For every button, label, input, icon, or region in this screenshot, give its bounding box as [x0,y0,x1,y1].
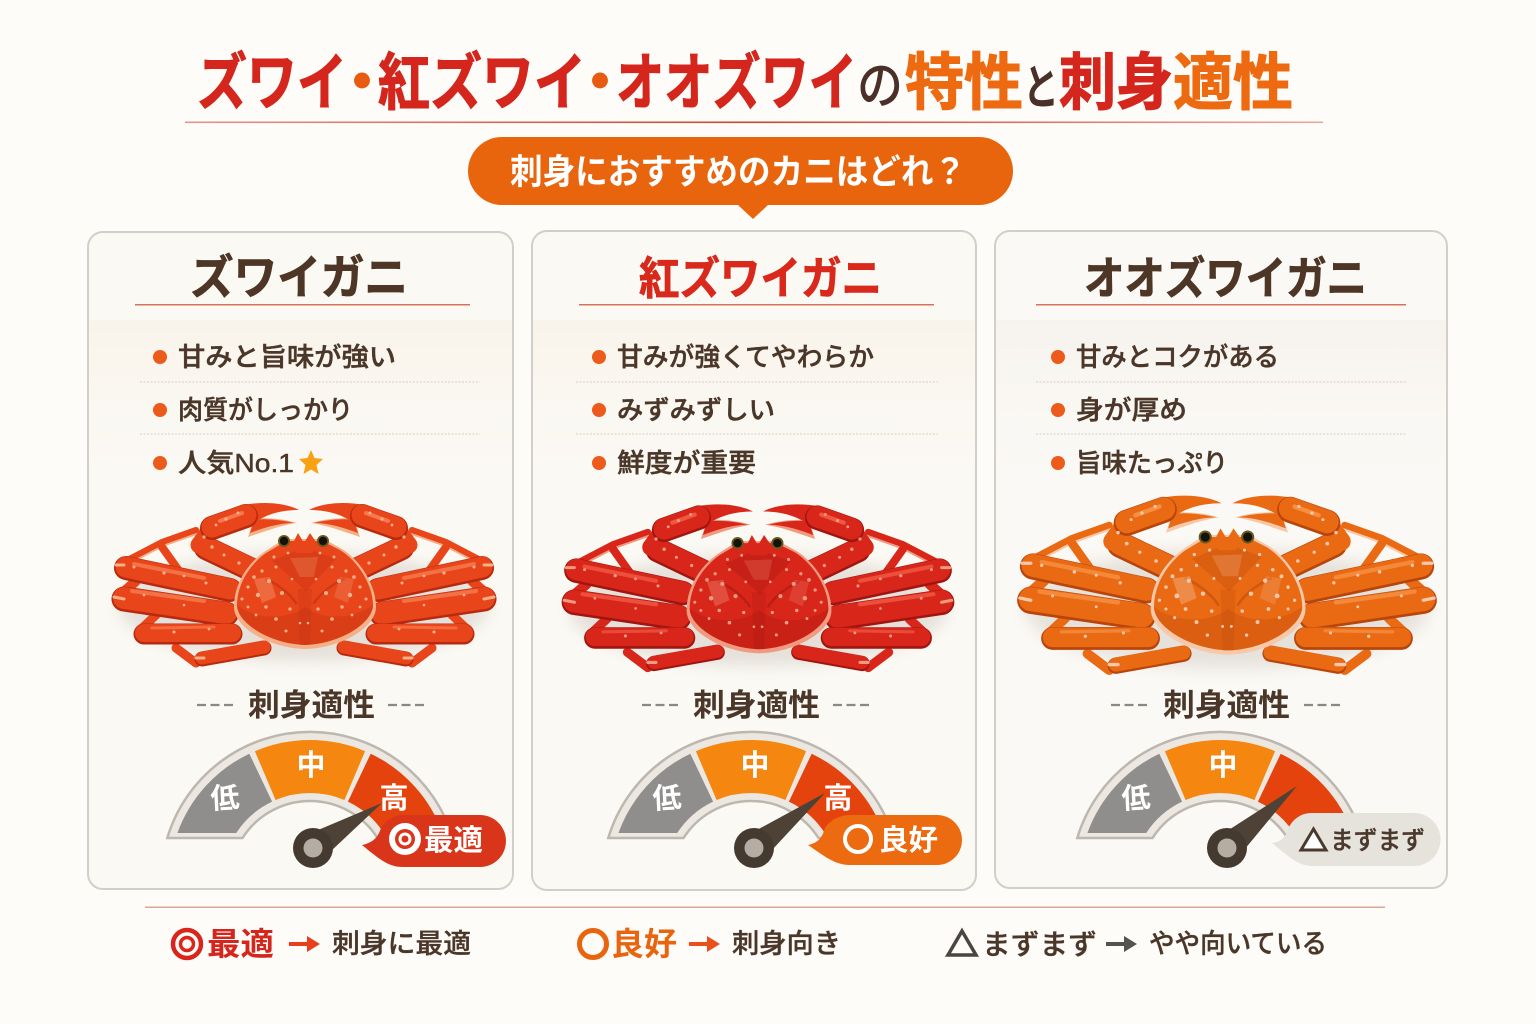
title: ・ [331,49,393,118]
needle: ズワイガニ [293,803,382,868]
question speech bubble: 刺身におすすめのカニはどれ？ [510,153,966,192]
gauge: ズワイガニ: 高 [379,782,409,815]
section label: 刺身適性: 刺身適性 [693,688,820,723]
badge: 良好 [808,815,962,865]
title: の [857,58,903,116]
gauge: オオズワイガニ [1077,732,1363,838]
feature list: 甘みと旨味が強い [178,342,396,372]
title: オオズワイ [616,49,857,118]
feature list [1036,342,1406,478]
legend: 良好 [580,926,841,962]
illustration: オオズワイガニ crab [1020,496,1434,670]
badge: まずまず [1272,813,1440,866]
gauge: 紅ズワイガニ: 高 [823,782,853,815]
feature list: 肉質がしっかり [178,395,353,425]
legend: 最適: 刺身に最適 [332,929,471,959]
feature list: 身が厚め [1076,395,1187,425]
feature list [140,342,480,478]
panel: ズワイガニ [88,232,513,889]
title [197,49,1293,118]
gauge: 紅ズワイガニ [608,732,894,838]
legend: まずまず: やや向いている [1149,929,1327,959]
legend: まずまず [948,929,1327,960]
feature list: 甘みが強くてやわらか [617,342,874,372]
gauge: 紅ズワイガニ: 低 [652,781,682,816]
question speech bubble [468,137,1013,219]
gauge: ズワイガニ: 中 [296,749,326,782]
panel: オオズワイガニ [995,231,1447,888]
title: と [1023,62,1059,115]
badge: 良好: 良好 [879,824,938,857]
needle: オオズワイガニ [1207,786,1297,868]
legend: 良好: 良好 [611,926,677,962]
feature list [576,342,938,478]
badge: 最適: 最適 [424,824,483,857]
title: 刺身 [1059,49,1173,118]
panel: 紅ズワイガニ [532,231,976,890]
title: ・ [569,49,631,118]
heading: ズワイガニ: ズワイガニ [190,251,408,304]
gauge: ズワイガニ [167,732,453,838]
heading: 紅ズワイガニ: 紅ズワイガニ [639,253,882,304]
title: ズワイ [197,49,347,118]
title: 紅ズワイ [378,49,586,118]
feature list: 甘みとコクがある [1076,342,1279,372]
legend: 良好: 刺身向き [732,929,841,959]
title: 特性 [905,49,1023,118]
illustration: ズワイガニ crab [114,503,494,663]
gauge: オオズワイガニ: 中 [1208,749,1238,782]
feature list: みずみずしい [617,395,775,425]
needle: 紅ズワイガニ [734,793,825,868]
legend: 最適: 最適 [207,926,274,962]
gauge: オオズワイガニ: 低 [1121,781,1151,816]
gauge: 紅ズワイガニ: 中 [740,749,770,782]
illustration: 紅ズワイガニ crab [564,504,952,668]
title: 適性 [1173,49,1293,118]
heading: オオズワイガニ: オオズワイガニ [1084,253,1367,304]
legend: 最適 [173,926,471,962]
section label: 刺身適性: 刺身適性 [1163,688,1290,723]
feature list: 旨味たっぷり [1076,448,1228,478]
section label: 刺身適性: 刺身適性 [248,688,375,723]
feature list: 人気No.1 [178,448,294,478]
legend: まずまず: まずまず [982,929,1097,960]
badge: 最適 [362,815,506,867]
feature list: 鮮度が重要 [617,448,756,478]
badge: まずまず: まずまず [1330,827,1425,855]
gauge: ズワイガニ: 低 [210,781,240,816]
